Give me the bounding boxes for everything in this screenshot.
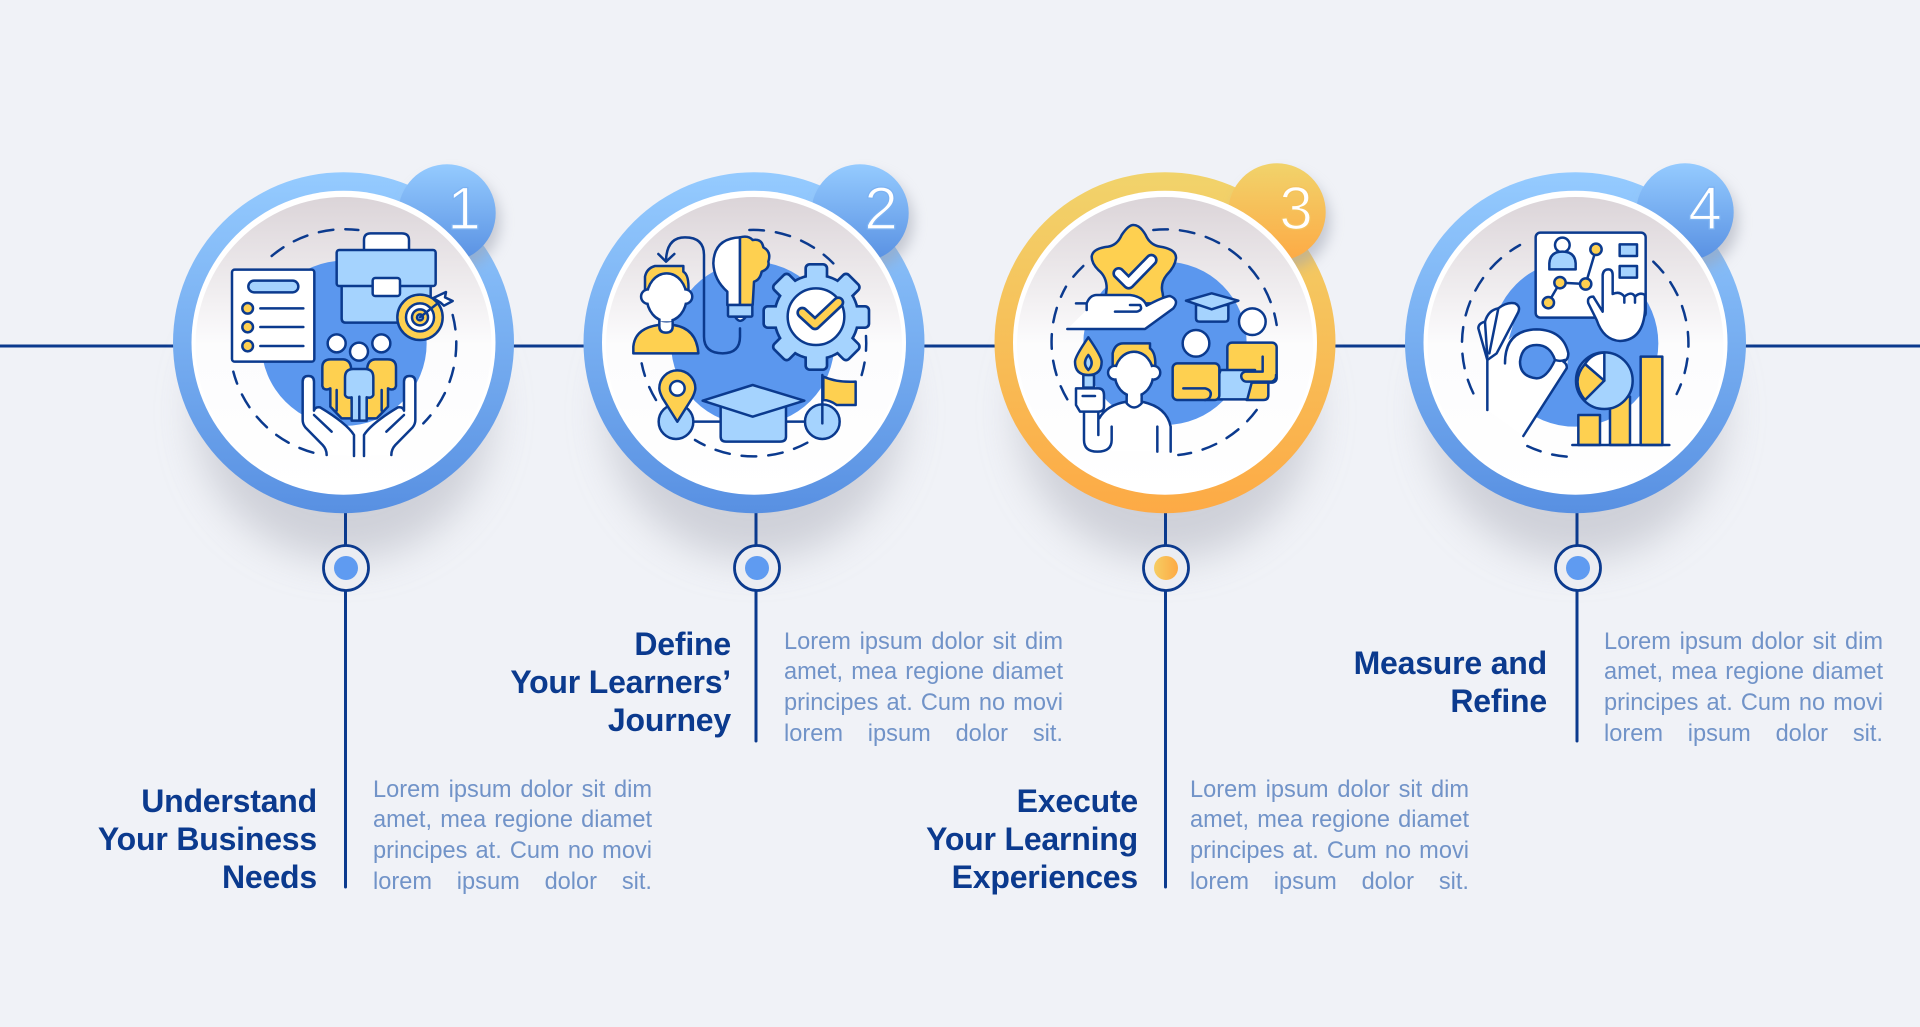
timeline horizontal line	[0, 344, 1920, 348]
ring 2	[584, 172, 924, 513]
step 2 circle	[584, 164, 924, 741]
step 3 circle	[994, 163, 1336, 887]
body text 3: Lorem ipsum dolor sit dim	[1190, 776, 1469, 802]
heading 1: Your Business	[98, 821, 317, 857]
badge 3	[1228, 163, 1326, 261]
badge shadow 3	[1234, 174, 1330, 270]
connector line 1	[344, 500, 347, 887]
heading 2: Journey	[608, 702, 731, 738]
icon: measure and refine	[1462, 233, 1688, 457]
inner disc 4	[1424, 191, 1728, 495]
number 2: 2	[864, 175, 898, 242]
heading 1	[98, 783, 317, 895]
badge shadow 1	[404, 174, 500, 270]
body text 3: principes at. Cum no movi	[1190, 838, 1469, 864]
heading 4	[1354, 645, 1547, 719]
body text 4: principes at. Cum no movi	[1604, 690, 1883, 716]
heading 3: Experiences	[952, 859, 1138, 895]
heading 3	[926, 783, 1138, 895]
icon: learners journey	[633, 230, 868, 456]
ring 1	[173, 172, 514, 513]
heading 1: Understand	[141, 783, 317, 819]
body text 3: amet, mea regione diamet	[1190, 807, 1469, 833]
connector line 3	[1164, 500, 1167, 887]
body text 2: principes at. Cum no movi	[784, 690, 1063, 716]
icon: business needs	[232, 229, 456, 456]
node 2	[734, 546, 780, 590]
body text 2: amet, mea regione diamet	[784, 659, 1063, 685]
body text 3: lorem ipsum dolor sit.	[1190, 869, 1469, 895]
body text 4	[1604, 628, 1883, 747]
body text 2	[784, 628, 1063, 747]
node 4	[1556, 546, 1600, 590]
body text 1: principes at. Cum no movi	[373, 838, 652, 864]
heading 3: Execute	[1017, 783, 1138, 819]
number 3: 3	[1279, 175, 1313, 242]
shadow 4	[1428, 264, 1724, 560]
number 4: 4	[1688, 175, 1722, 242]
shadow 2	[607, 264, 903, 560]
heading 2	[510, 626, 731, 738]
node 3	[1144, 546, 1188, 590]
body text 4: amet, mea regione diamet	[1604, 659, 1883, 685]
inner disc 2	[602, 191, 906, 495]
body text 1: lorem ipsum dolor sit.	[373, 869, 652, 895]
step 4 circle	[1405, 163, 1746, 741]
heading 2: Define	[634, 626, 731, 662]
connector line 2	[754, 500, 758, 741]
ring 3	[994, 172, 1336, 513]
body text 3	[1190, 776, 1469, 895]
connector line 4	[1576, 500, 1578, 741]
heading 1: Needs	[222, 859, 317, 895]
number 1: 1	[447, 175, 481, 242]
badge 4	[1636, 163, 1734, 261]
shadow 1	[196, 264, 492, 560]
body text 4: Lorem ipsum dolor sit dim	[1604, 628, 1883, 654]
body text 2: lorem ipsum dolor sit.	[784, 721, 1063, 747]
badge 2	[811, 164, 909, 262]
body text 1: amet, mea regione diamet	[373, 807, 652, 833]
inner disc 1	[192, 191, 496, 495]
heading 4: Measure and	[1354, 645, 1547, 681]
badge 1	[398, 164, 496, 262]
badge shadow 4	[1642, 174, 1738, 270]
shadow 3	[1018, 264, 1314, 560]
step 1 circle	[173, 164, 514, 887]
body text 1: Lorem ipsum dolor sit dim	[373, 776, 652, 802]
badge shadow 2	[817, 174, 913, 270]
heading 4: Refine	[1450, 683, 1547, 719]
inner disc 3	[1013, 191, 1317, 495]
body text 4: lorem ipsum dolor sit.	[1604, 721, 1883, 747]
heading 2: Your Learners’	[510, 664, 731, 700]
icon: execute experiences	[1052, 225, 1277, 455]
node 1	[324, 546, 368, 590]
body text 1	[373, 776, 652, 895]
ring 4	[1405, 172, 1746, 513]
body text 2: Lorem ipsum dolor sit dim	[784, 628, 1063, 654]
heading 3: Your Learning	[926, 821, 1138, 857]
